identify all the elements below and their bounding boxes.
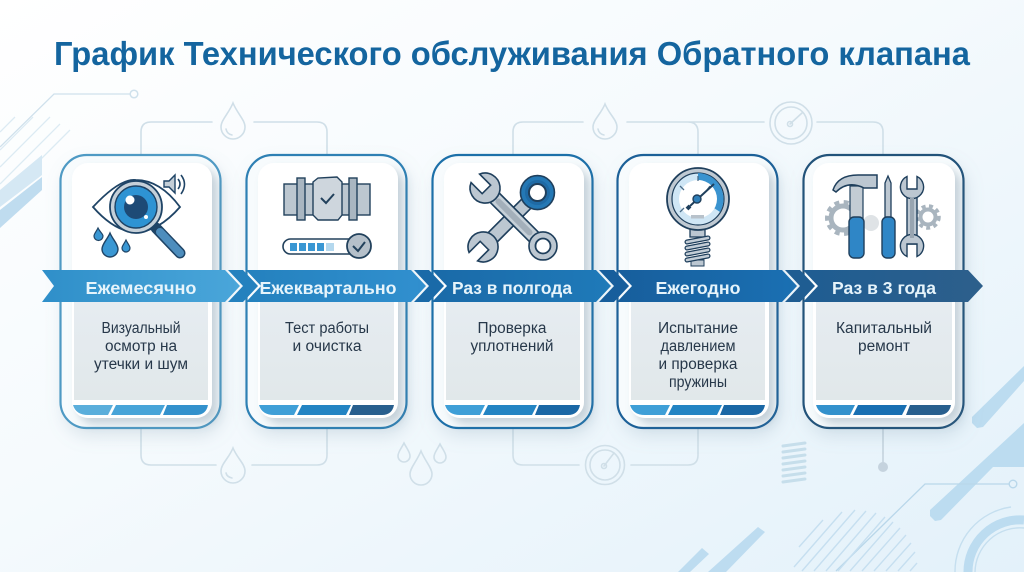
title: График Технического обслуживания Обратного клапана	[54, 35, 971, 72]
text: monthly task	[94, 320, 188, 373]
text: quarterly task: Тест работы	[285, 320, 369, 337]
banner: Ежемесячно: Ежемесячно	[86, 278, 196, 298]
panel: three-year	[785, 155, 983, 428]
text: semi-annual task: Проверка	[478, 320, 547, 337]
icon: crossed wrenches	[461, 168, 563, 269]
text: quarterly task: и очистка	[292, 338, 362, 355]
banner: Ежегодно: Ежегодно	[656, 278, 740, 298]
text: monthly task: осмотр на	[105, 338, 177, 355]
text: semi-annual task: уплотнений	[470, 338, 554, 355]
banner: Раз в полгода: Раз в полгода	[452, 278, 572, 298]
text: annual task: давлением	[660, 338, 736, 355]
text: quarterly task	[285, 320, 369, 355]
decoration: spring	[783, 443, 805, 482]
panel: monthly	[42, 155, 240, 428]
banner: Ежемесячно	[42, 270, 240, 302]
text: three-year task	[836, 320, 932, 355]
banner: Раз в 3 года	[785, 270, 983, 302]
connector: cards 1-2 top	[141, 103, 327, 154]
connector: cards 3-4-5 top with drop and gauge	[513, 102, 883, 154]
text: three-year task: ремонт	[858, 338, 910, 355]
icon: valve and progress bar	[283, 177, 371, 258]
decoration: top-left circuit and hatching	[0, 90, 138, 228]
banner: Раз в полгода	[414, 270, 611, 302]
banner: Раз в 3 года: Раз в 3 года	[832, 278, 936, 298]
text: annual task: и проверка	[658, 356, 738, 373]
icon: hammer, screwdriver, wrench and gears	[827, 175, 939, 258]
panel: quarterly	[228, 155, 426, 428]
icon: eye with magnifier	[93, 175, 184, 257]
text: three-year task: Капитальный	[836, 320, 932, 337]
decoration: bottom-right shapes	[678, 366, 1024, 572]
text: annual task	[658, 320, 738, 391]
connector: cards 1-2 bottom	[141, 428, 327, 483]
banner: Ежегодно	[599, 270, 797, 302]
icon: pressure gauge with spring	[667, 168, 729, 266]
panel: semi-annual	[414, 155, 611, 428]
text: annual task: Испытание	[658, 320, 738, 337]
text: monthly task: Визуальный	[102, 320, 180, 337]
text: semi-annual task	[470, 320, 554, 355]
connector: card 5 pin	[878, 428, 888, 472]
banner: Ежеквартально	[228, 270, 426, 302]
text: annual task: пружины	[669, 374, 727, 391]
banner: Ежеквартально: Ежеквартально	[260, 278, 396, 298]
panel: annual	[599, 155, 797, 428]
connector: cards 3-4 bottom with gauge	[513, 428, 698, 484]
decoration: water drops	[398, 443, 446, 485]
text: monthly task: утечки и шум	[94, 356, 188, 373]
